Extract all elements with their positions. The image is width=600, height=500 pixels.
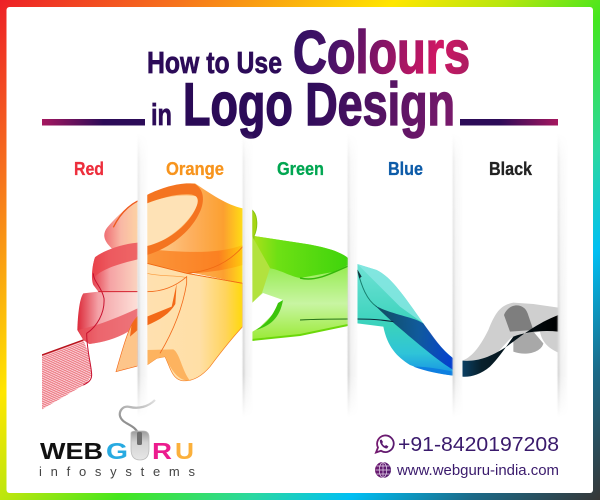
title rule: left [42,119,145,126]
title [147,19,470,138]
icon: computer mouse with cable [120,400,155,460]
title rule: right [460,119,558,126]
logo wordmark: R [152,438,172,464]
ribbon: red panel [42,201,138,409]
label: Blue: Blue [388,159,423,179]
label: Black: Black [489,159,533,179]
title line: How to Use Colours: How to Use [147,45,282,80]
logo wordmark [40,438,194,464]
icon: globe [375,462,391,478]
ribbon: orange panel [147,183,243,381]
logo tagline: infosystems [39,464,196,479]
title line: in Logo Design [151,71,455,138]
ribbon: green panel [252,210,348,340]
logo wordmark: WEB [40,438,103,464]
logo wordmark: U [130,438,150,464]
logo wordmark: G [106,438,128,464]
label: Red: Red [74,159,104,179]
icon: whatsapp [376,435,394,452]
title line: How to Use Colours: Colours [293,19,470,86]
title line: in Logo Design: Logo Design [183,71,455,138]
logo wordmark: U [175,438,194,464]
label: Green: Green [277,159,324,179]
title line: How to Use Colours [147,19,470,86]
contact: website: www.webguru-india.com [396,462,559,479]
ribbon: blue panel [357,264,453,376]
contact: phone: +91-8420197208 [398,434,559,456]
panel divider shadows [136,133,568,417]
colour labels [74,159,533,179]
logo: WebGuru Infosystems [39,400,196,479]
title line: in Logo Design: in [151,97,172,132]
ribbon: black panel [462,303,558,377]
label: Orange: Orange [166,159,224,179]
